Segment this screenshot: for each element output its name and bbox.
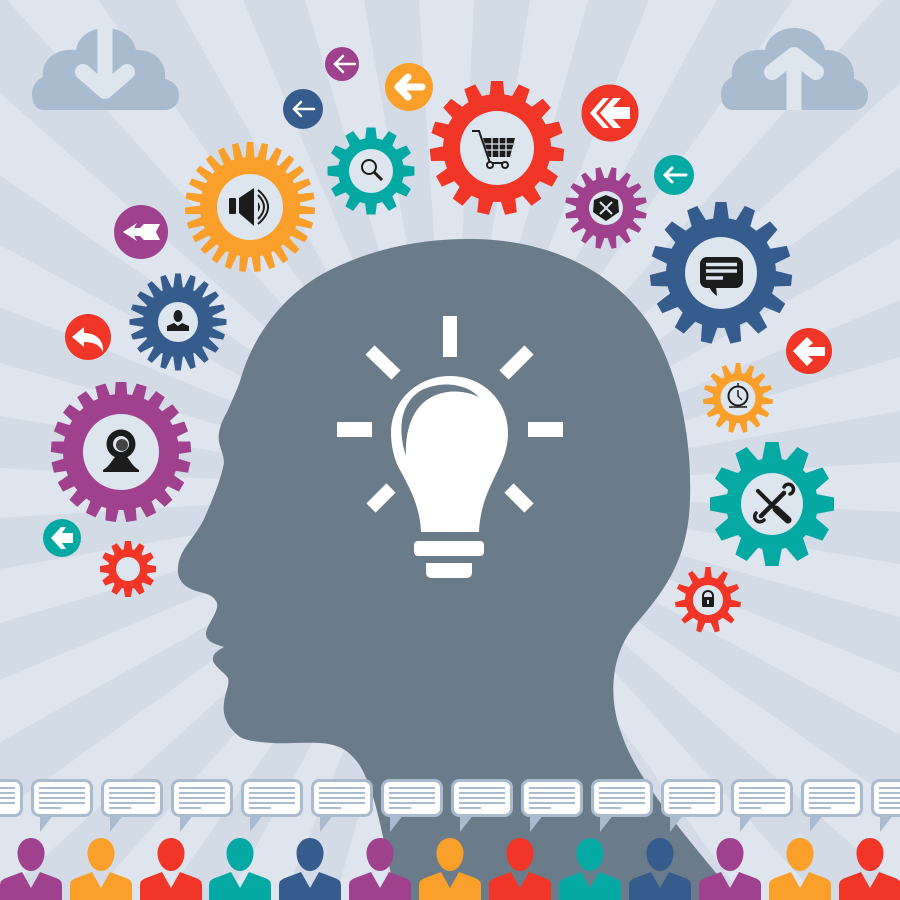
icon: padlock: [702, 591, 714, 607]
gear: shopping cart: [430, 81, 564, 215]
gear: shield: [558, 160, 654, 256]
icon: cart: [472, 131, 515, 168]
arrow badge: teal thin: [654, 155, 694, 195]
icon: cloud upload: [721, 28, 868, 110]
arrow badge: blue thin: [283, 89, 323, 129]
arrow badge: teal bold: [43, 519, 81, 557]
arrow badge: purple thin: [325, 47, 359, 81]
gear: small red: [100, 541, 156, 597]
ray top right: [504, 350, 529, 375]
gear: webcam: [51, 382, 191, 522]
head silhouette: [178, 239, 722, 900]
ray left: [337, 422, 372, 437]
bulb base lower: [426, 563, 472, 578]
light bulb with rays: [337, 316, 563, 578]
icon: cloud download: [32, 28, 179, 110]
icon: webcam: [103, 430, 139, 472]
ray bottom right: [509, 488, 529, 508]
ray right: [528, 422, 563, 437]
gear: padlock: [675, 567, 741, 633]
arrow badge: red back: [65, 314, 111, 360]
bulb glass: [391, 376, 508, 532]
icon: speech bubble: [700, 257, 743, 296]
gear: speaker: [185, 142, 315, 272]
gear: message: [650, 202, 792, 344]
bulb highlight: [401, 384, 479, 456]
bulb base upper: [414, 541, 484, 556]
icon: person: [167, 310, 189, 331]
gear: person: [130, 274, 226, 370]
arrow badge: red right side: [786, 328, 832, 374]
gear: stopwatch: [703, 363, 773, 433]
ray top: [443, 316, 457, 357]
icon: stopwatch: [728, 383, 748, 407]
icon: magnifier: [362, 160, 382, 180]
gear: magnifier: [328, 128, 414, 214]
icon: shield: [593, 195, 619, 221]
people row: [0, 838, 900, 900]
ray top left: [370, 350, 396, 375]
ray bottom left: [371, 488, 391, 508]
icon: tools: [755, 484, 793, 522]
arrow badge: purple fletched: [114, 205, 168, 259]
gear: tools: [710, 442, 834, 566]
speech bubbles row: [0, 780, 900, 832]
icon: speaker: [229, 188, 268, 226]
arrow badge: red double chevron: [582, 84, 638, 142]
arrow badge: orange bold: [385, 63, 433, 111]
